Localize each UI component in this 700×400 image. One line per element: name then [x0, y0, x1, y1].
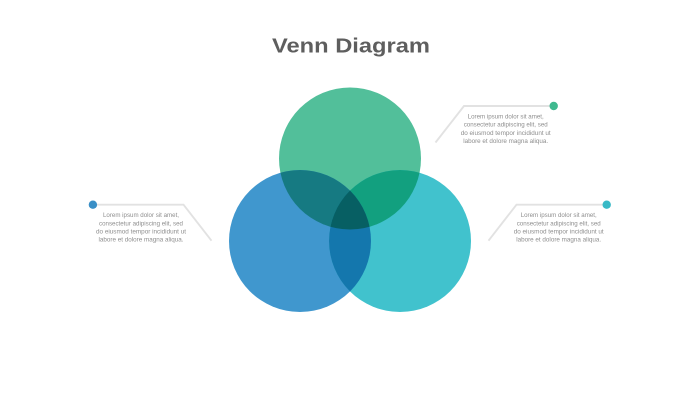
text block: Lorem ipsum dolor sit amet,: [468, 114, 544, 120]
text block: Lorem ipsum dolor sit amet,: [103, 212, 179, 219]
text block: consectetur adipiscing elit, sed: [99, 220, 183, 227]
text block: consectetur adipiscing elit, sed: [517, 220, 601, 227]
overlap: top and right: [350, 170, 420, 227]
circle: left blue: [229, 170, 371, 312]
overlap: top and left: [280, 170, 350, 227]
overlap: center: [330, 190, 370, 230]
text block: [514, 212, 604, 244]
dot: [550, 102, 558, 110]
callout: left: [89, 200, 212, 244]
text block: do eiusmod tempor incididunt ut: [514, 228, 604, 236]
connector line: [488, 205, 606, 241]
text block: do eiusmod tempor incididunt ut: [96, 228, 186, 236]
circle: top green: [279, 88, 421, 230]
dot: [89, 200, 97, 209]
text block: labore et dolore magna aliqua.: [98, 236, 184, 244]
text block: consectetur adipiscing elit, sed: [464, 122, 548, 129]
circle: right teal: [329, 170, 471, 312]
connector line: [436, 106, 553, 142]
dot: [602, 200, 611, 209]
callout: right: [488, 200, 611, 244]
text block: labore et dolore magna aliqua.: [516, 236, 601, 244]
callout: top right: [436, 102, 558, 145]
title: Venn Diagram: [272, 34, 430, 57]
text block: labore et dolore magna aliqua.: [463, 138, 548, 145]
text block: do eiusmod tempor incididunt ut: [461, 130, 551, 137]
overlap: left and right: [329, 190, 371, 292]
text block: [96, 212, 186, 244]
connector line: [93, 205, 212, 241]
text block: [461, 114, 551, 145]
text block: Lorem ipsum dolor sit amet,: [521, 212, 597, 219]
venn diagram: [229, 88, 471, 312]
